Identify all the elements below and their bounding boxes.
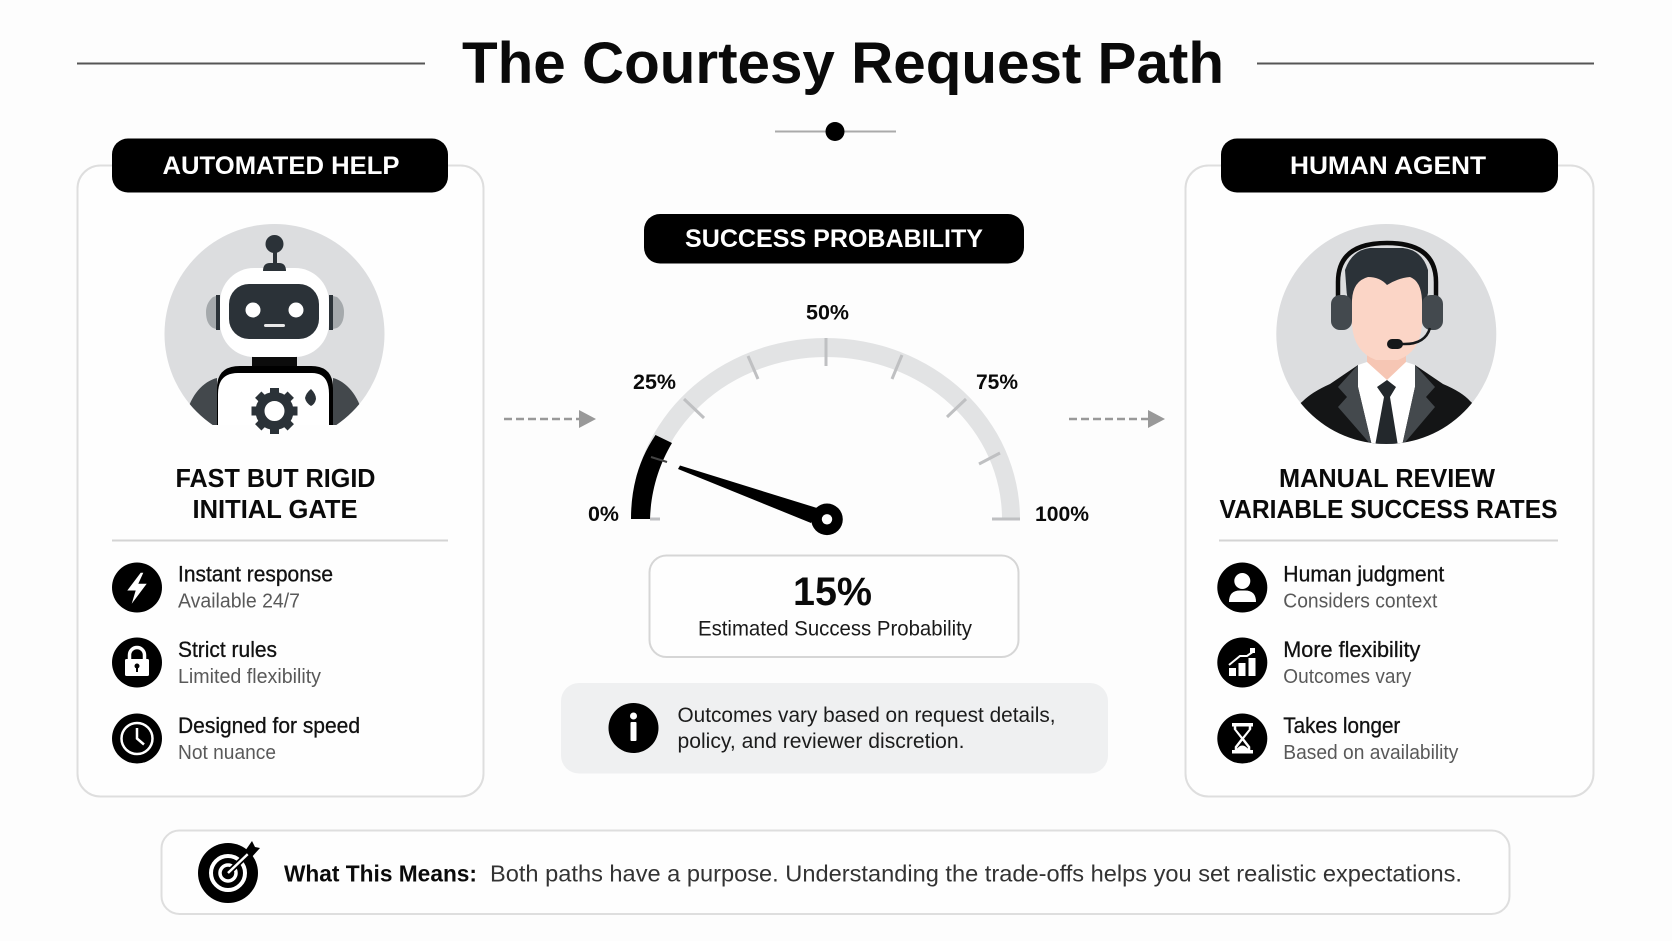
panel frame [78, 166, 484, 796]
item: human judgment: Considers context [1283, 590, 1438, 612]
item: designed for speed: Not nuance [178, 742, 276, 764]
badge: human agent: HUMAN AGENT [1290, 152, 1486, 180]
title ornament [775, 122, 896, 141]
item: instant response: Available 24/7 [178, 590, 300, 612]
panel subtitle: FAST BUT RIGID [176, 463, 376, 493]
item: strict rules [112, 637, 321, 688]
gauge track [631, 338, 1020, 519]
gauge needle [678, 466, 843, 535]
panel subtitle: MANUAL REVIEW [1279, 463, 1495, 493]
gauge labels: 0% [588, 503, 619, 526]
takeaway text: Both paths have a purpose. Understanding the trade-offs helps you set realistic expectations. [490, 860, 1462, 886]
value card: 15% [793, 570, 872, 614]
panel: human agent [1186, 138, 1594, 796]
gauge labels: 75% [976, 371, 1018, 394]
gauge labels [588, 302, 1089, 526]
bottom takeaway bar [162, 830, 1510, 914]
title: The Courtesy Request Path [462, 31, 1224, 96]
item: strict rules: Strict rules [178, 637, 277, 662]
value card: Estimated Success Probability [698, 618, 972, 640]
gauge labels: 100% [1035, 503, 1089, 526]
item: more flexibility: More flexibility [1283, 637, 1420, 662]
gauge labels: 50% [806, 302, 849, 324]
takeaway text: What This Means: [284, 860, 477, 886]
item: human judgment: Human judgment [1283, 562, 1444, 586]
item: more flexibility: Outcomes vary [1283, 666, 1411, 688]
panel subtitle [176, 463, 376, 524]
item: instant response: Instant response [178, 562, 333, 586]
arrow: to human agent [1069, 410, 1165, 428]
item: instant response [112, 562, 333, 612]
panel: automated help [78, 138, 484, 796]
panel subtitle: INITIAL GATE [192, 494, 358, 524]
info note [561, 683, 1108, 774]
icon: target with arrow [198, 841, 260, 903]
item: takes longer [1217, 713, 1458, 764]
badge: human agent [1221, 138, 1558, 192]
item: takes longer: Based on availability [1283, 742, 1458, 764]
panel subtitle [1220, 463, 1558, 524]
icon: robot [164, 224, 384, 447]
panel frame [1186, 166, 1594, 796]
item: human judgment [1217, 562, 1444, 612]
info note: policy, and reviewer discretion. [678, 730, 964, 753]
gauge labels: 25% [633, 371, 676, 394]
info note: Outcomes vary based on request details, [678, 704, 1056, 727]
badge: automated help: AUTOMATED HELP [162, 152, 400, 180]
item: more flexibility [1217, 637, 1420, 688]
badge: success probability: SUCCESS PROBABILITY [685, 225, 983, 253]
item: designed for speed: Designed for speed [178, 713, 360, 738]
value card [650, 556, 1018, 657]
gauge chart [588, 302, 1089, 535]
badge: automated help [112, 138, 448, 192]
gauge value arc [631, 435, 672, 519]
item: strict rules: Limited flexibility [178, 666, 321, 688]
panel subtitle: VARIABLE SUCCESS RATES [1220, 494, 1558, 524]
badge: success probability [644, 214, 1024, 264]
item: designed for speed [112, 713, 360, 764]
arrow: to gauge [504, 410, 596, 428]
item: takes longer: Takes longer [1283, 713, 1400, 738]
icon: human agent with headset [1276, 224, 1496, 450]
